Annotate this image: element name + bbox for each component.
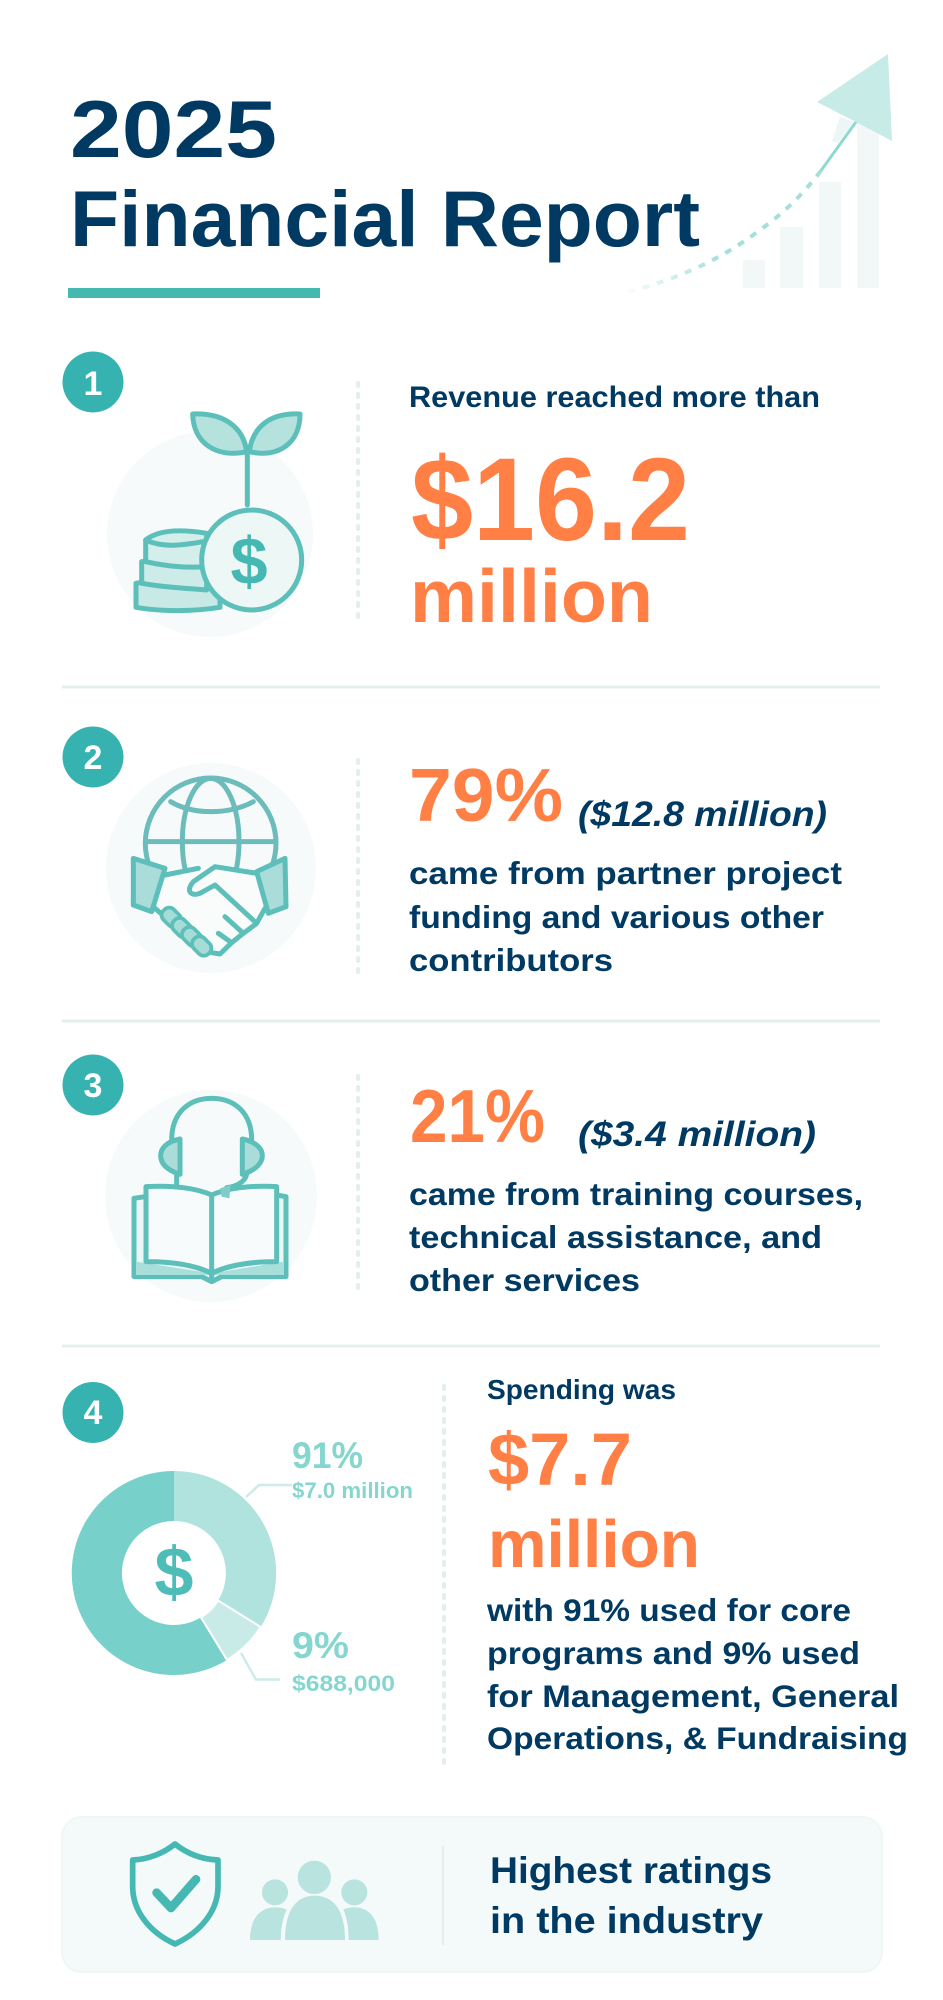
section 1: revenue <box>62 352 820 638</box>
divider dots <box>356 1076 360 1289</box>
number badge 1 <box>62 352 124 412</box>
spending text: Spending was <box>487 1374 676 1405</box>
spending text: for Management, General <box>487 1678 899 1714</box>
divider <box>62 686 880 688</box>
revenue text: $16.2 <box>411 434 690 566</box>
divider dots <box>356 760 360 973</box>
divider dots <box>356 383 360 622</box>
funding text: funding and various other <box>409 899 824 935</box>
ratings text: Highest ratings <box>490 1850 772 1891</box>
callout: 9%: 9% <box>292 1625 349 1666</box>
donut chart <box>72 1471 276 1675</box>
number badge 3 <box>62 1054 124 1116</box>
funding text: contributors <box>409 942 613 978</box>
title underline <box>68 288 320 298</box>
training text: 21% <box>410 1074 545 1158</box>
callout: 9% <box>241 1625 395 1696</box>
spending text: Operations, & Fundraising <box>487 1720 908 1756</box>
icon: globe and handshake <box>106 763 316 973</box>
callout: 91% <box>246 1435 413 1503</box>
header <box>68 54 892 298</box>
spending text: programs and 9% used <box>487 1635 860 1671</box>
callout: 91%: 91% <box>292 1435 363 1476</box>
funding text: ($12.8 million) <box>578 795 827 834</box>
training text: came from training courses, <box>409 1176 863 1212</box>
decorative growth chart with arrow <box>628 54 892 292</box>
funding text: came from partner project <box>409 855 843 891</box>
title: 2025 <box>70 85 277 175</box>
spending text <box>486 1374 908 1756</box>
donut chart: $ <box>155 1533 193 1611</box>
divider dots <box>442 1386 446 1768</box>
icon: people <box>250 1861 379 1940</box>
number badge 1: 1 <box>84 365 102 403</box>
icon: shield with check <box>133 1844 218 1944</box>
section 4: spending <box>62 1374 908 1768</box>
training text <box>409 1074 863 1298</box>
icon: headphones and book <box>105 1090 317 1302</box>
number badge 3: 3 <box>84 1067 102 1105</box>
title <box>70 85 700 263</box>
panel separator <box>442 1846 444 1945</box>
callout: 9%: $688,000 <box>292 1671 395 1696</box>
spending text: $7.7 <box>488 1418 632 1501</box>
training text: ($3.4 million) <box>578 1115 816 1154</box>
section 3: training <box>62 1054 863 1302</box>
number badge 2 <box>62 726 124 788</box>
number badge 4: 4 <box>84 1394 103 1432</box>
revenue text <box>409 381 820 638</box>
revenue text: million <box>410 554 653 638</box>
spending text: with 91% used for core <box>486 1592 851 1628</box>
number badge 4 <box>62 1382 124 1443</box>
spending text: million <box>488 1507 700 1582</box>
section 2: partner funding <box>62 726 843 978</box>
panel: ratings <box>62 1817 882 1972</box>
funding text: 79% <box>409 753 563 837</box>
divider <box>62 1344 880 1348</box>
callout: 91%: $7.0 million <box>292 1478 413 1503</box>
icon: coins and sprout: $ <box>230 525 268 599</box>
training text: other services <box>409 1262 640 1298</box>
ratings text: in the industry <box>490 1900 763 1941</box>
ratings text <box>490 1850 772 1941</box>
title: Financial Report <box>70 174 700 263</box>
number badge 2: 2 <box>84 739 102 777</box>
revenue text: Revenue reached more than <box>409 381 820 414</box>
divider <box>62 1020 880 1022</box>
funding text <box>409 753 843 978</box>
training text: technical assistance, and <box>409 1219 822 1255</box>
icon: coins and sprout <box>107 414 313 637</box>
